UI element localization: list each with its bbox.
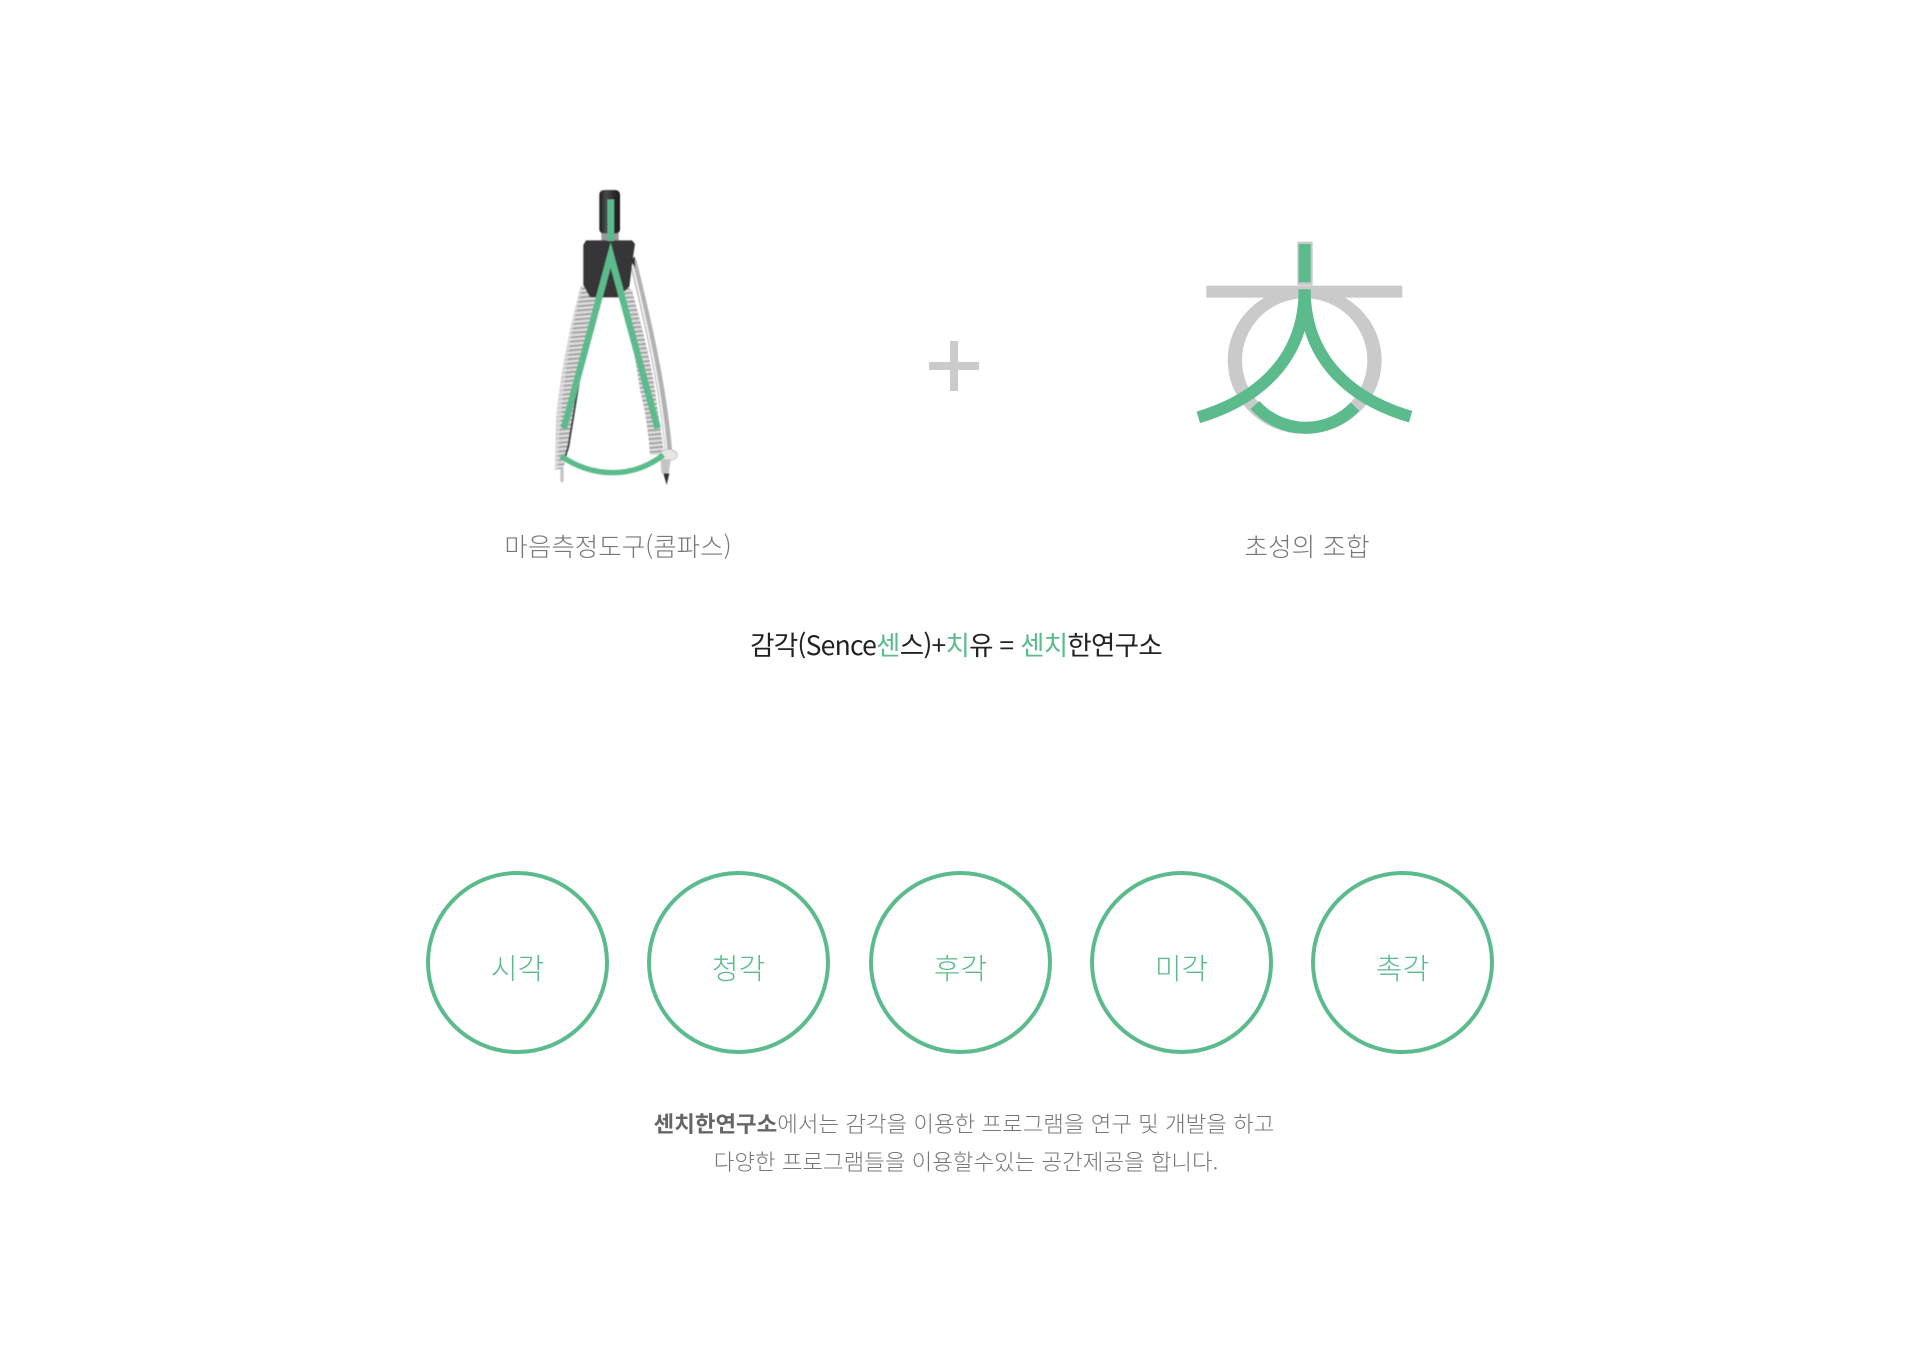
text block: description: 센치한연구소에서는 감각을 이용한 프로그램을 연구 및 개발을 하고 (654, 1107, 1274, 1139)
icon: initial consonants logo (1196, 242, 1412, 434)
text block: description: 다양한 프로그램들을 이용할수있는 공간제공을 합니다. (714, 1145, 1218, 1177)
icon: compass with green overlay (554, 189, 678, 486)
circle: sight (426, 871, 609, 1054)
icon: plus sign (929, 341, 979, 391)
heading: name formula: 감각(Sence센스)+치유 = 센치한연구소 (750, 624, 1162, 663)
label: compass caption: 마음측정도구(콤파스) (504, 527, 732, 564)
circle: smell: 후각 (934, 946, 987, 988)
circle: taste: 미각 (1155, 946, 1208, 988)
circle: smell (869, 871, 1052, 1054)
text block: description (654, 1107, 1274, 1177)
circle: taste (1090, 871, 1273, 1054)
label: logo caption: 초성의 조합 (1244, 527, 1370, 564)
circle: touch (1311, 871, 1494, 1054)
circle: sight: 시각 (491, 946, 544, 988)
circle: hearing: 청각 (712, 946, 765, 988)
circle: touch: 촉각 (1376, 946, 1429, 988)
circle: hearing (647, 871, 830, 1054)
